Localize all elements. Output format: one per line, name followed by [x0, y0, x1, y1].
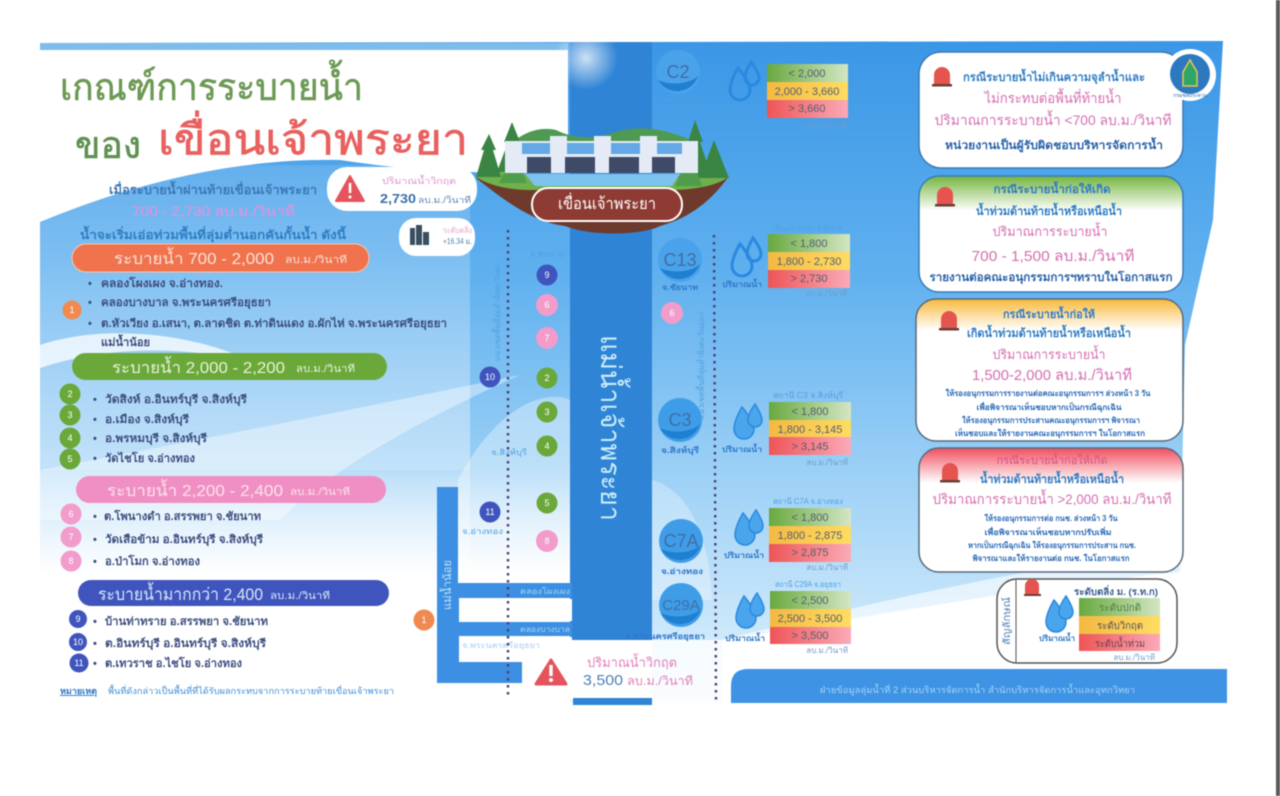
main title	[60, 59, 468, 167]
list: group 2: •	[93, 453, 97, 465]
list: group 2: •	[93, 433, 97, 445]
list: group 2: วัดสิงห์ อ.อินทร์บุรี จ.สิงห์บุรี	[105, 393, 247, 407]
icon: alarm	[932, 67, 952, 86]
list: group 1: •	[88, 278, 92, 290]
canal label: Phong Pheng: คลองโผงเผง	[520, 586, 570, 596]
table C13: < 1,800	[790, 238, 828, 250]
list: group 1: แม่น้ำน้อย	[101, 334, 150, 349]
Sing Buri label: จ.สิงห์บุรี	[491, 447, 528, 457]
list: group 1	[88, 276, 447, 349]
intro text	[80, 180, 347, 243]
list: group 2	[93, 393, 247, 465]
table C13: ลบ.ม./วินาที	[805, 289, 847, 298]
markers 6 to 8: 7	[68, 532, 74, 542]
icon: drops C7A: ปริมาณน้ำ	[724, 549, 764, 560]
footnote: หมายเหตุ	[60, 686, 97, 697]
table C3	[769, 390, 851, 467]
footnote: พื้นที่ดังกล่าวเป็นพื้นที่ที่ได้รับผลกระทบจากการระบายท้ายเขื่อนเจ้าพระยา	[108, 684, 394, 696]
markers 9 to 11: 11	[74, 658, 84, 668]
panel: case 700-1,500	[919, 176, 1183, 292]
markers 2 to 5	[60, 384, 80, 470]
icon: alarm	[1024, 579, 1041, 596]
intro line 3: น้ำจะเริ่มเอ่อท่วมพื้นที่ลุ่มต่ำนอกคันกั้นน้ำ ดังนี้	[80, 225, 347, 243]
markers 2 to 5: 3	[67, 410, 73, 420]
hills	[505, 128, 700, 155]
list: group 4: •	[93, 658, 97, 670]
list: group 3: •	[93, 511, 97, 523]
icon: warning large	[536, 660, 566, 684]
pill: 2,200-2,400: ลบ.ม./วินาที	[290, 486, 350, 498]
pill: 2,200-2,400	[76, 476, 386, 503]
table C29A	[770, 580, 851, 655]
list: group 4: ต.เทวราช อ.ไชโย จ.อ่างทอง	[105, 656, 242, 670]
icon: warning	[336, 176, 364, 201]
station C7A	[659, 519, 703, 576]
river markers: 2	[544, 373, 550, 383]
markers 2 to 5: 5	[67, 454, 73, 464]
markers 2 to 5: 2	[67, 389, 73, 399]
list: group 2: •	[93, 394, 97, 406]
legend levels: ระดับปกติ	[1099, 603, 1141, 614]
river markers	[414, 264, 683, 630]
action text: พิจารณาและให้รายงานต่อ กนช. ในโอกาสแรก	[972, 553, 1130, 563]
panel: case 1,500-2,000	[916, 299, 1183, 441]
callout: critical flow 2,730	[327, 167, 477, 211]
footnote	[60, 684, 394, 697]
footer bar: ฝ่ายข้อมูลลุ่มน้ำที่ 2 ส่วนบริหารจัดการน้ำ สำนักบริหารจัดการน้ำและอุทกวิทยา	[820, 683, 1135, 696]
level value: +16.34 ม.	[443, 237, 472, 246]
panel: case below 700	[919, 52, 1183, 168]
Ang Thong label: จ.อ่างทอง	[462, 527, 503, 536]
west bank markers: 8	[544, 536, 550, 546]
station C3: จ.สิงห์บุรี	[661, 445, 700, 456]
station C29A	[625, 583, 705, 642]
callout value: 2,730	[380, 191, 416, 206]
white title area	[40, 50, 568, 222]
icon: alarm	[935, 187, 955, 206]
trees left	[476, 122, 527, 183]
table C13: > 2,730	[790, 273, 828, 285]
west bank markers: 6	[544, 300, 550, 310]
canal label: Noi river: แม่น้ำน้อย	[439, 560, 454, 610]
markers 9 to 11: 10	[73, 637, 83, 647]
action text: เห็นชอบและให้รายงานคณะอนุกรรมการฯ ในโอกาสแรก	[955, 427, 1145, 439]
table C3: สถานี C3 จ.สิงห์บุรี	[773, 390, 844, 400]
table C2: 2,000 - 3,660	[775, 86, 839, 98]
action text: หากเป็นกรณีฉุกเฉิน ให้รองอนุกรรมการประสาน กนช.	[968, 539, 1136, 551]
station C7A: จ.อ่างทอง	[661, 567, 703, 576]
pill: 2,000-2,200: ลบ.ม./วินาที	[296, 363, 355, 375]
table C13: 1,800 - 2,730	[777, 256, 841, 268]
pill: 2,000-2,200: ระบายน้ำ 2,000 - 2,200	[112, 356, 285, 377]
list: group 4: ต.อินทร์บุรี อ.อินทร์บุรี จ.สิงห์บุรี	[105, 637, 266, 651]
station C29A: จ.พระนครศรีอยุธยา	[625, 631, 705, 642]
icon: alarm	[939, 311, 959, 330]
icon: drops C3	[722, 404, 762, 454]
list: group 1: คลองบางบาล จ.พระนครศรีอยุธยา	[101, 296, 271, 310]
subheading: ไม่กระทบต่อพื้นที่ท้ายน้ำ	[984, 88, 1122, 106]
intro line 1: เมื่อระบายน้ำผ่านท้ายเขื่อนเจ้าพระยา	[109, 180, 317, 197]
name plate	[532, 188, 682, 221]
table C3: > 3,145	[791, 441, 829, 453]
action text	[968, 513, 1136, 563]
icon: drops C13	[722, 238, 762, 289]
action text: เพื่อพิจารณาเห็นชอบหากปรับเพิ่ม	[984, 526, 1112, 537]
station C2: จ.นครสวรรค์	[654, 94, 706, 104]
callout label: ปริมาณน้ำวิกฤต	[382, 174, 456, 186]
icon: alarm	[940, 463, 960, 482]
table C13: เขื่อนเจ้าพระยา จ.ชัยนาท	[773, 222, 843, 233]
action: หน่วยงานเป็นผู้รับผิดชอบบริหารจัดการน้ำ	[945, 137, 1163, 153]
title line 1: เกณฑ์การระบายน้ำ	[60, 59, 363, 109]
table C29A: > 3,500	[791, 630, 829, 642]
icon: drops C2	[730, 62, 759, 100]
icon: drops	[1046, 596, 1073, 632]
water below dam	[525, 174, 680, 186]
table C29A: สถานี C29A จ.อยุธยา	[775, 580, 841, 589]
station C13: จ.ชัยนาท	[662, 283, 698, 292]
list: group 4: บ้านท่าทราย อ.สรรพยา จ.ชัยนาท	[105, 615, 268, 628]
heading: กรณีระบายน้ำก่อให้เกิด	[996, 452, 1108, 467]
list: group 1: คลองโผงเผง จ.อ่างทอง.	[101, 276, 223, 290]
legend table heading: ระดับตลิ่ง ม. (ร.ท.ก)	[1074, 584, 1158, 598]
list: group 4: •	[93, 616, 97, 628]
station C2	[654, 50, 706, 104]
subheading: น้ำท่วมด้านท้ายน้ำหรือเหนือน้ำ	[980, 470, 1124, 486]
river name: แม่น้ำเจ้าพระยา	[595, 335, 631, 521]
dam gates	[527, 157, 675, 173]
callout: critical flow 3,500	[536, 653, 693, 689]
list: group 1: •	[88, 297, 92, 309]
legend levels	[1079, 598, 1160, 651]
table C7A	[769, 497, 851, 572]
river markers: 10	[485, 372, 495, 382]
action text: ให้รองอนุกรรมการต่อ กนช. ล่วงหน้า 3 วัน	[984, 513, 1118, 524]
heading: กรณีระบายน้ำไม่เกินความจุลำน้ำและ	[963, 68, 1145, 85]
list: group 3: •	[93, 534, 97, 546]
subheading: น้ำท่วมด้านท้ายน้ำหรือเหนือน้ำ	[976, 202, 1122, 218]
action text	[946, 388, 1151, 439]
list: group 2: อ.พรหมบุรี จ.สิงห์บุรี	[105, 432, 207, 446]
pill: over 2,400: ระบายน้ำมากกว่า 2,400	[98, 582, 263, 604]
west bank markers: 7	[544, 333, 550, 343]
river markers: 3	[544, 407, 550, 417]
river markers: 11	[485, 507, 495, 517]
station C7A: C7A	[663, 531, 699, 551]
list: group 1: ต.หัวเวียง อ.เสนา, ต.ลาดชิด ต.ท่าดินแดง อ.ผักไห่ จ.พระนครศรีอยุธยา	[101, 316, 447, 331]
list: group 3: อ.ป่าโมก จ.อ่างทอง	[105, 554, 200, 568]
list: group 4	[93, 615, 268, 670]
heading: กรณีระบายน้ำก่อให้เกิด	[994, 181, 1110, 196]
critical label: ปริมาณน้ำวิกฤต	[587, 653, 677, 670]
station C13: C13	[663, 250, 697, 270]
critical value: 3,500	[583, 672, 623, 689]
list: group 2: วัดไชโย จ.อ่างทอง	[105, 451, 195, 465]
east bank marker 6: 6	[669, 308, 675, 318]
illustration: dam on island	[476, 120, 729, 234]
discharge: ปริมาณการระบายน้ำ <700 ลบ.ม./วินาที	[934, 110, 1172, 128]
dam towers	[550, 136, 657, 154]
icon: drops C13: ปริมาณน้ำ	[722, 278, 762, 289]
callout unit: ลบ.ม./วินาที	[418, 195, 471, 205]
Noi river marker 1: 1	[421, 615, 427, 625]
discharge: ปริมาณการระบายน้ำ >2,000 ลบ.ม./วินาที	[932, 489, 1172, 507]
legend unit: ลบ.ม./วินาที	[1113, 653, 1155, 662]
station C3: C3	[668, 410, 692, 430]
table C2	[767, 64, 848, 130]
list: group 4: •	[93, 638, 97, 650]
icon: drops C29A	[725, 593, 765, 643]
pill: 700-2,000: ลบ.ม./วินาที	[285, 254, 347, 266]
canal label: Bang Ban: คลองบางบาล	[520, 625, 570, 634]
table C2: < 2,000	[788, 68, 826, 80]
dam wall	[505, 141, 698, 173]
dotted boundary lines	[508, 230, 716, 702]
list: group 3: •	[93, 556, 97, 568]
trees right	[675, 120, 729, 186]
table C29A: 2,500 - 3,500	[778, 613, 842, 625]
east bank boundary label: แนวเขตพื้นที่ลุ่มต่ำฝั่งตะวันออก	[695, 312, 706, 420]
canal label: Ayutthaya: จ.พระนครศรีอยุธยา	[462, 641, 540, 650]
subheading: เกิดน้ำท่วมด้านท้ายน้ำหรือเหนือน้ำ	[967, 324, 1131, 340]
icon: drops C29A: ปริมาณน้ำ	[725, 632, 765, 643]
discharge label: ปริมาณการระบายน้ำ	[992, 222, 1108, 239]
title line 2 prefix: ของ	[75, 125, 141, 167]
soil	[476, 176, 729, 234]
markers 6 to 8: 6	[68, 509, 74, 519]
river markers: 9	[544, 270, 550, 280]
critical unit: ลบ.ม./วินาที	[627, 674, 693, 688]
pill: over 2,400	[78, 580, 389, 606]
footer bar	[731, 669, 1227, 703]
level label: ระดับตลิ่ง	[443, 224, 472, 235]
discharge value: 700 - 1,500 ลบ.ม./วินาที	[972, 248, 1134, 265]
station C3	[658, 398, 702, 456]
legend levels: ระดับวิกฤต	[1097, 621, 1143, 632]
action: รายงานต่อคณะอนุกรรมการฯทราบในโอกาสแรก	[930, 270, 1173, 285]
icon: department logo	[1164, 49, 1216, 101]
table C7A: สถานี C7A จ.อ่างทอง	[773, 497, 843, 506]
table C7A: > 2,875	[791, 547, 829, 559]
icon: department logo: กรมชลประทาน	[1173, 93, 1207, 99]
markers 6 to 8: 8	[68, 556, 74, 566]
markers 9 to 11	[69, 610, 88, 672]
discharge value: 1,500-2,000 ลบ.ม./วินาที	[972, 367, 1132, 384]
pill: 700-2,000	[72, 244, 369, 272]
intro discharge range: 700 - 2,730 ลบ.ม./วินาที	[132, 203, 295, 219]
pill: 700-2,000: ระบายน้ำ 700 - 2,000	[114, 247, 274, 268]
river markers: 5	[544, 498, 550, 508]
station C29A: C29A	[662, 597, 700, 614]
table C7A: ลบ.ม./วินาที	[806, 563, 848, 572]
west bank boundary label: แนวเขตพื้นที่ลุ่มต่ำฝั่งตะวันตก	[491, 263, 502, 361]
river: Chao Phraya	[470, 26, 652, 705]
station C2: C2	[666, 62, 690, 82]
table C29A: < 2,500	[791, 595, 829, 607]
title line 2 dam name: เขื่อนเจ้าพระยา	[158, 111, 468, 163]
table C3: < 1,800	[791, 406, 829, 418]
table C13	[768, 222, 850, 298]
panel: legend	[997, 579, 1177, 663]
Noi river marker 1	[414, 610, 434, 630]
boundary labels	[462, 250, 706, 536]
pill: over 2,400: ลบ.ม./วินาที	[270, 590, 330, 602]
canal network	[437, 487, 572, 683]
table C7A: 1,800 - 2,875	[778, 530, 842, 542]
icon: drops C7A	[724, 510, 764, 560]
markers 6 to 8	[60, 504, 82, 572]
action text: ให้รองอนุกรรมการประสานคณะอนุกรรมการฯ พิจารณา	[962, 415, 1140, 426]
river markers: 4	[544, 441, 550, 451]
east bank marker 6	[661, 302, 683, 324]
markers 9 to 11: 9	[75, 614, 81, 624]
list: group 3: ต.โพนางดำ อ.สรรพยา จ.ชัยนาท	[104, 509, 261, 523]
station C13	[658, 238, 702, 292]
pill: 2,000-2,200	[72, 353, 387, 380]
table C2: ลบ.ม./วินาที	[805, 121, 847, 130]
panel: case over 2,000	[919, 448, 1183, 572]
list: group 3: วัดเสือข้าม อ.อินทร์บุรี จ.สิงห์บุรี	[105, 533, 263, 547]
table C3: 1,800 - 3,145	[778, 424, 842, 436]
icon: buildings	[410, 225, 429, 245]
icon: drops C3: ปริมาณน้ำ	[722, 443, 762, 454]
marker 1: 1	[69, 305, 75, 315]
list: group 1: •	[88, 318, 92, 330]
list: group 2: อ.เมือง จ.สิงห์บุรี	[105, 413, 189, 427]
table C2: > 3,660	[788, 103, 826, 115]
callout: bank level	[399, 218, 475, 256]
Chainat label: จ.ชัยนาท	[530, 250, 565, 259]
table C3: ลบ.ม./วินาที	[806, 458, 848, 467]
marker 1	[62, 300, 82, 320]
dam name: เขื่อนเจ้าพระยา	[558, 192, 656, 213]
list: group 2: •	[93, 414, 97, 426]
heading: กรณีระบายน้ำก่อให้	[1003, 306, 1095, 321]
west bank markers	[536, 294, 558, 552]
list: group 3	[93, 509, 263, 568]
legend levels: ระดับน้ำท่วม	[1095, 636, 1145, 650]
pill: 2,200-2,400: ระบายน้ำ 2,200 - 2,400	[107, 479, 283, 500]
table C7A: < 1,800	[791, 512, 829, 524]
grass	[476, 172, 729, 190]
action text: เพื่อพิจารณาเห็นชอบหากเป็นกรณีฉุกเฉิน	[976, 401, 1122, 413]
action text: ให้รองอนุกรรมการรายงานต่อคณะอนุกรรมการฯ ล่วงหน้า 3 วัน	[946, 388, 1151, 399]
drop label: ปริมาณน้ำ	[1039, 632, 1075, 643]
discharge label: ปริมาณการระบายน้ำ	[992, 345, 1106, 362]
markers 2 to 5: 4	[67, 433, 73, 443]
legend title: สัญลักษณ์	[1001, 597, 1013, 645]
table C29A: ลบ.ม./วินาที	[806, 646, 848, 655]
